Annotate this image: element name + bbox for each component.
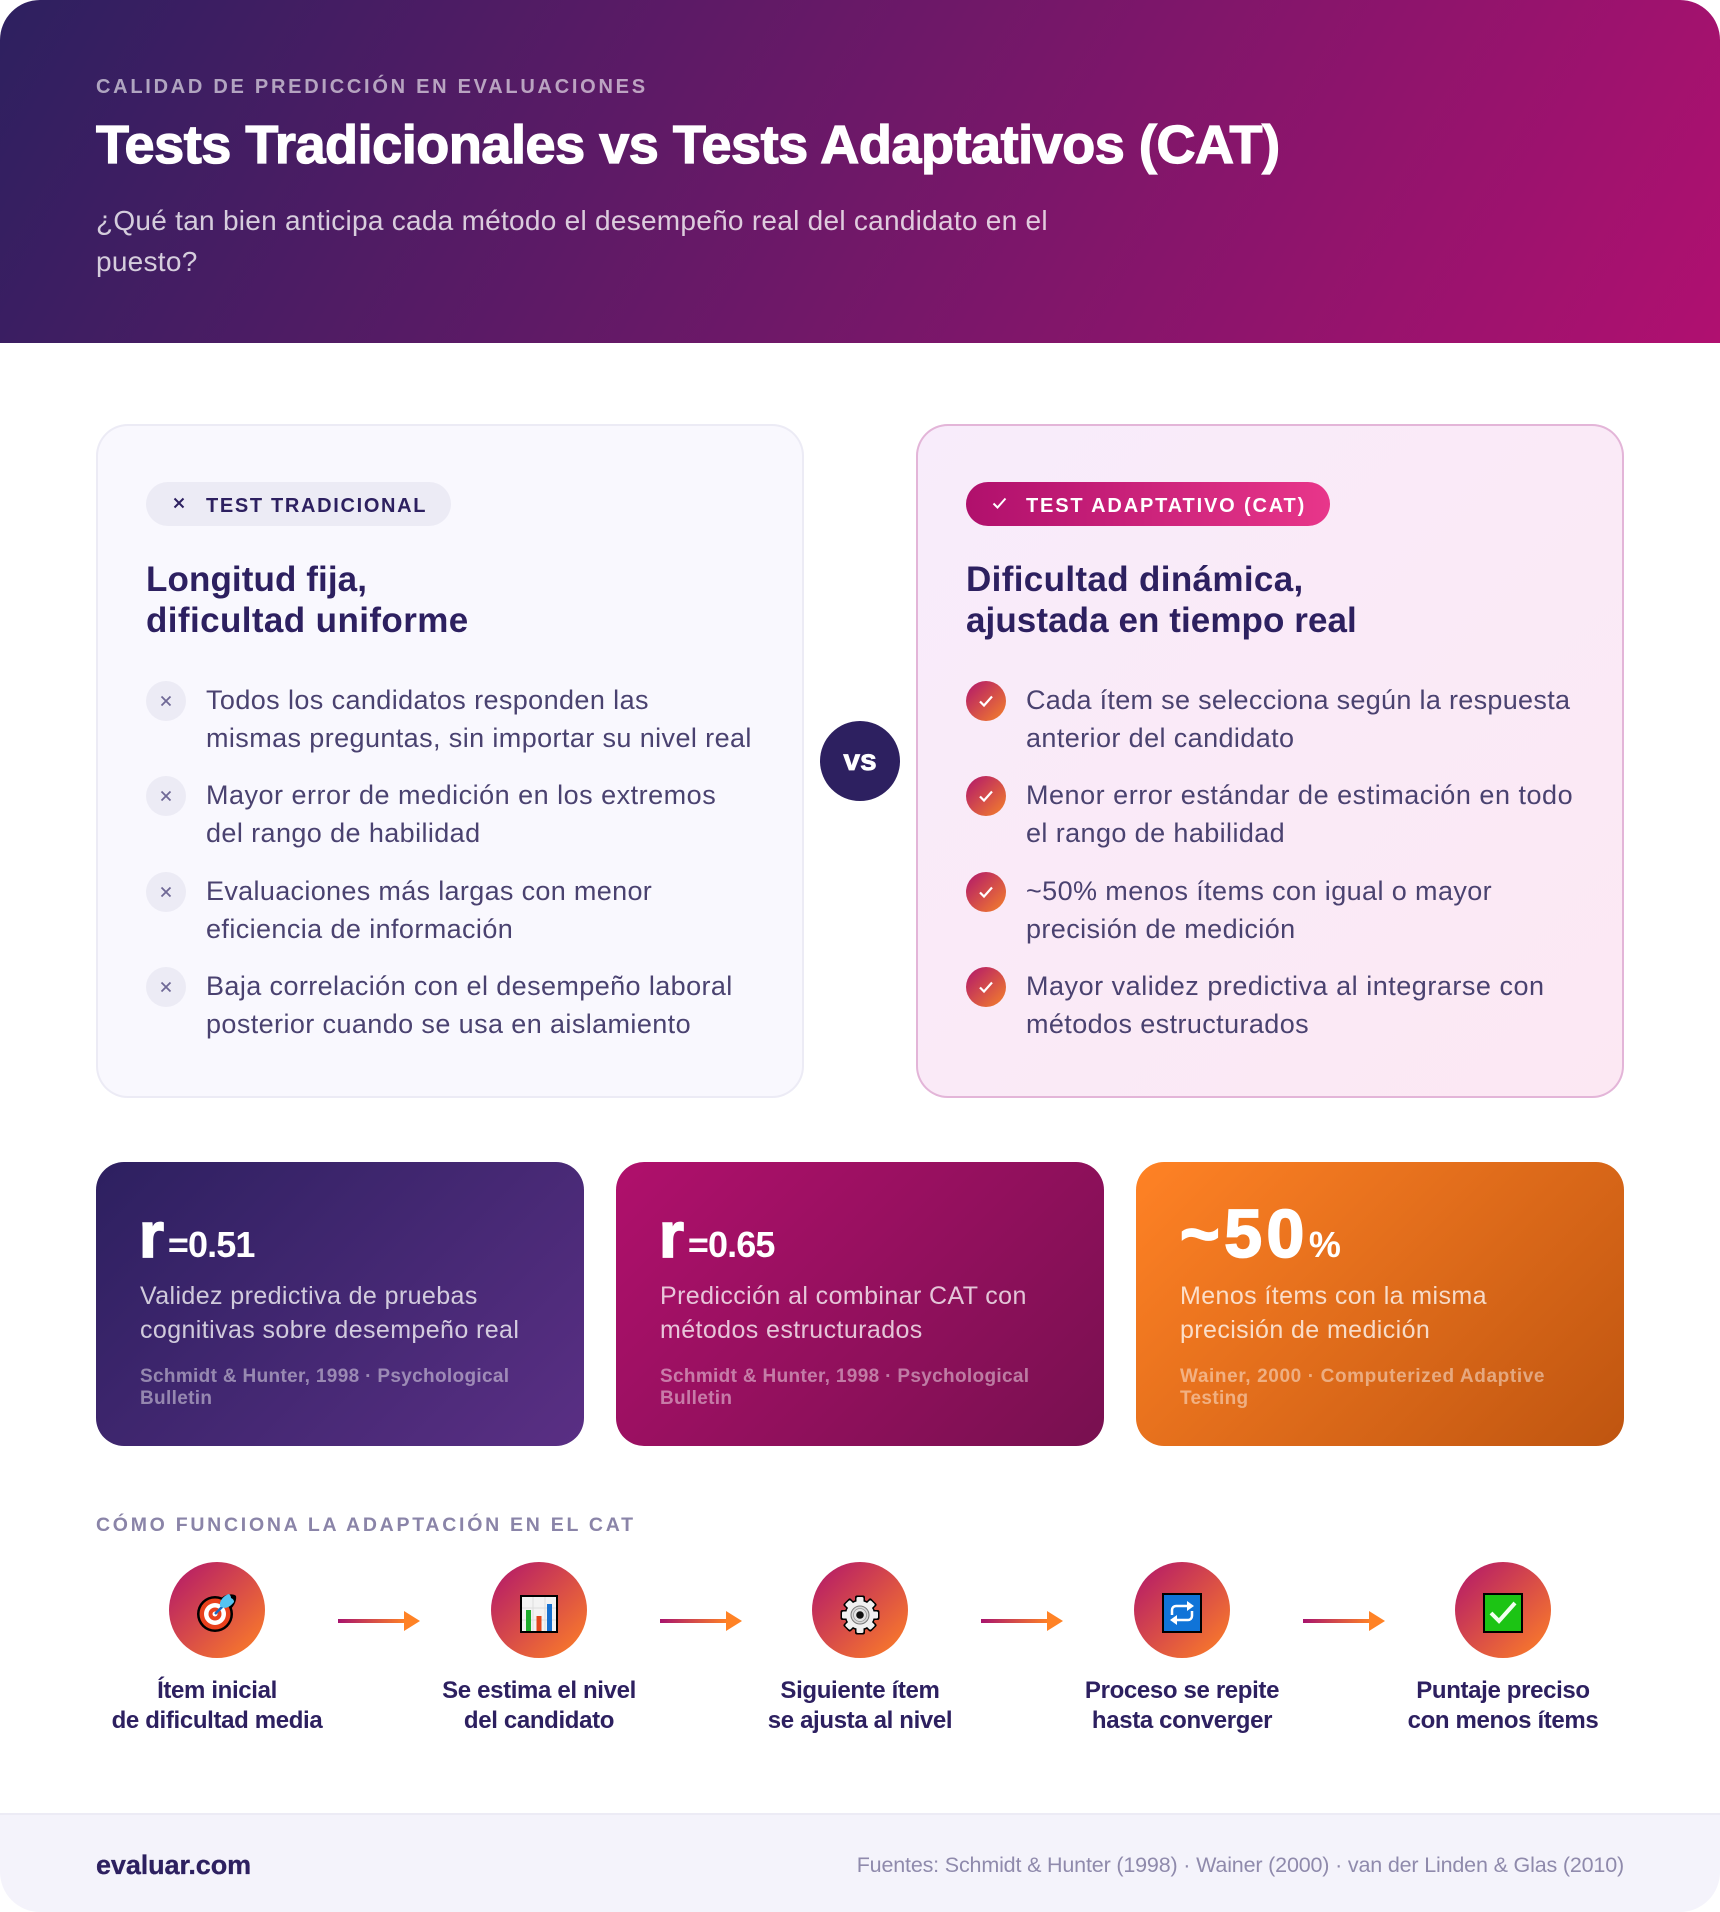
item line 2: mismas preguntas, sin importar su nivel real bbox=[206, 723, 752, 753]
panel: test tradicional bbox=[96, 424, 804, 1098]
panel heading line 2: dificultad uniforme bbox=[146, 601, 469, 640]
item line 2: posterior cuando se usa en aislamiento bbox=[206, 1009, 691, 1039]
step 1 label bbox=[112, 1676, 323, 1734]
icon: repeat bbox=[1162, 1593, 1202, 1633]
subtitle line 2: puesto? bbox=[96, 246, 198, 277]
section heading: process: CÓMO FUNCIONA LA ADAPTACIÓN EN EL CAT bbox=[96, 1514, 636, 1536]
stat card: ~50% bbox=[1136, 1162, 1624, 1446]
item line 1: ~50% menos ítems con igual o mayor bbox=[1026, 876, 1492, 906]
label line 2: de dificultad media bbox=[112, 1707, 322, 1734]
badge: test adaptativo bbox=[966, 482, 1330, 526]
stat source line 1: Schmidt & Hunter, 1998 · Psychological bbox=[140, 1366, 509, 1387]
badge: test tradicional bbox=[146, 482, 451, 526]
step 2 circle bbox=[491, 1562, 587, 1658]
stat description line 2: cognitivas sobre desempeño real bbox=[140, 1316, 519, 1344]
item line 1: Mayor error de medición en los extremos bbox=[206, 780, 716, 810]
icon: check bullet bbox=[966, 872, 1006, 912]
arrow 4 bbox=[1303, 1611, 1385, 1631]
panel: test adaptativo bbox=[916, 424, 1624, 1098]
stat number: r=0.65 bbox=[659, 1199, 774, 1271]
vs badge bbox=[820, 721, 900, 801]
header banner bbox=[0, 0, 1720, 343]
stat description line 1: Predicción al combinar CAT con bbox=[660, 1282, 1027, 1310]
label line 1: Ítem inicial bbox=[157, 1677, 277, 1704]
stat source line 2: Bulletin bbox=[140, 1388, 212, 1409]
step 5 circle bbox=[1455, 1562, 1551, 1658]
badge label: TEST TRADICIONAL bbox=[206, 495, 427, 517]
item line 1: Cada ítem se selecciona según la respuesta bbox=[1026, 685, 1570, 715]
label line 2: con menos ítems bbox=[1408, 1707, 1598, 1734]
label line 2: se ajusta al nivel bbox=[768, 1707, 952, 1734]
step 4 circle bbox=[1134, 1562, 1230, 1658]
stat number: ~50% bbox=[1180, 1196, 1341, 1272]
stat source line 1: Wainer, 2000 · Computerized Adaptive bbox=[1180, 1366, 1545, 1387]
icon: check bullet bbox=[966, 681, 1006, 721]
list item 1 bbox=[146, 681, 752, 753]
arrow 1 bbox=[338, 1611, 420, 1631]
stat description line 1: Validez predictiva de pruebas bbox=[140, 1282, 478, 1310]
item line 2: el rango de habilidad bbox=[1026, 818, 1285, 848]
stat source line 2: Testing bbox=[1180, 1388, 1248, 1409]
stat description line 2: precisión de medición bbox=[1180, 1316, 1430, 1344]
icon: x bullet bbox=[146, 681, 186, 721]
eyebrow: CALIDAD DE PREDICCIÓN EN EVALUACIONES bbox=[96, 76, 648, 98]
item line 1: Evaluaciones más largas con menor bbox=[206, 876, 652, 906]
footer bbox=[0, 1813, 1720, 1912]
icon: target bbox=[197, 1594, 236, 1632]
step 1 circle bbox=[169, 1562, 265, 1658]
step 4 label bbox=[1085, 1677, 1279, 1734]
icon: check bullet bbox=[966, 967, 1006, 1007]
list item 4 bbox=[966, 967, 1545, 1039]
icon: gear bbox=[840, 1596, 880, 1634]
item line 2: métodos estructurados bbox=[1026, 1009, 1309, 1039]
item line 1: Todos los candidatos responden las bbox=[206, 685, 649, 715]
stat card: r=0.51 bbox=[96, 1162, 584, 1446]
icon: x bullet bbox=[146, 872, 186, 912]
list item 3 bbox=[146, 872, 652, 944]
icon: check bbox=[992, 498, 1006, 509]
step 3 label bbox=[768, 1677, 952, 1734]
panel heading: Dificultad dinámica, bbox=[966, 560, 1304, 599]
item line 2: anterior del candidato bbox=[1026, 723, 1294, 753]
vs badge: vs bbox=[843, 744, 877, 777]
item line 2: eficiencia de información bbox=[206, 914, 513, 944]
step 3 circle bbox=[812, 1562, 908, 1658]
stat source line 2: Bulletin bbox=[660, 1388, 732, 1409]
stat source line 1: Schmidt & Hunter, 1998 · Psychological bbox=[660, 1366, 1029, 1387]
stat card: r=0.65 bbox=[616, 1162, 1104, 1446]
item line 1: Mayor validez predictiva al integrarse con bbox=[1026, 971, 1545, 1001]
label line 1: Proceso se repite bbox=[1085, 1677, 1279, 1704]
icon: cross bbox=[174, 498, 184, 508]
arrow 2 bbox=[660, 1611, 742, 1631]
panel heading: Longitud fija, bbox=[146, 560, 367, 599]
label line 2: del candidato bbox=[464, 1707, 614, 1734]
panel heading line 2: ajustada en tiempo real bbox=[966, 601, 1357, 640]
item line 1: Menor error estándar de estimación en todo bbox=[1026, 780, 1573, 810]
list item 2 bbox=[146, 776, 716, 848]
list item 1 bbox=[966, 681, 1570, 753]
badge label: TEST ADAPTATIVO (CAT) bbox=[1026, 495, 1306, 517]
step 2 label bbox=[442, 1677, 636, 1734]
item line 2: precisión de medición bbox=[1026, 914, 1296, 944]
stat description line 1: Menos ítems con la misma bbox=[1180, 1282, 1487, 1310]
item line 1: Baja correlación con el desempeño laboral bbox=[206, 971, 733, 1001]
stat description line 2: métodos estructurados bbox=[660, 1316, 923, 1344]
list item 4 bbox=[146, 967, 733, 1039]
icon: check bullet bbox=[966, 776, 1006, 816]
item line 2: del rango de habilidad bbox=[206, 818, 481, 848]
stat number: r=0.51 bbox=[139, 1199, 254, 1271]
sources: Fuentes: Schmidt & Hunter (1998) · Wainer (2000) · van der Linden & Glas (2010) bbox=[857, 1853, 1624, 1877]
label line 2: hasta converger bbox=[1092, 1707, 1272, 1734]
title: Tests Tradicionales vs Tests Adaptativos (CAT) bbox=[96, 115, 1280, 175]
list item 2 bbox=[966, 776, 1573, 848]
step 5 label bbox=[1408, 1677, 1598, 1734]
label line 1: Se estima el nivel bbox=[442, 1677, 636, 1704]
icon: check mark bbox=[1483, 1593, 1523, 1633]
arrow 3 bbox=[981, 1611, 1063, 1631]
subtitle line 1: ¿Qué tan bien anticipa cada método el desempeño real del candidato en el bbox=[96, 205, 1048, 236]
list item 3 bbox=[966, 872, 1492, 944]
label line 1: Puntaje preciso bbox=[1416, 1677, 1590, 1704]
icon: x bullet bbox=[146, 776, 186, 816]
label line 1: Siguiente ítem bbox=[780, 1677, 940, 1704]
icon: x bullet bbox=[146, 967, 186, 1007]
icon: bar chart bbox=[520, 1595, 558, 1633]
brand: evaluar.com bbox=[96, 1850, 251, 1880]
